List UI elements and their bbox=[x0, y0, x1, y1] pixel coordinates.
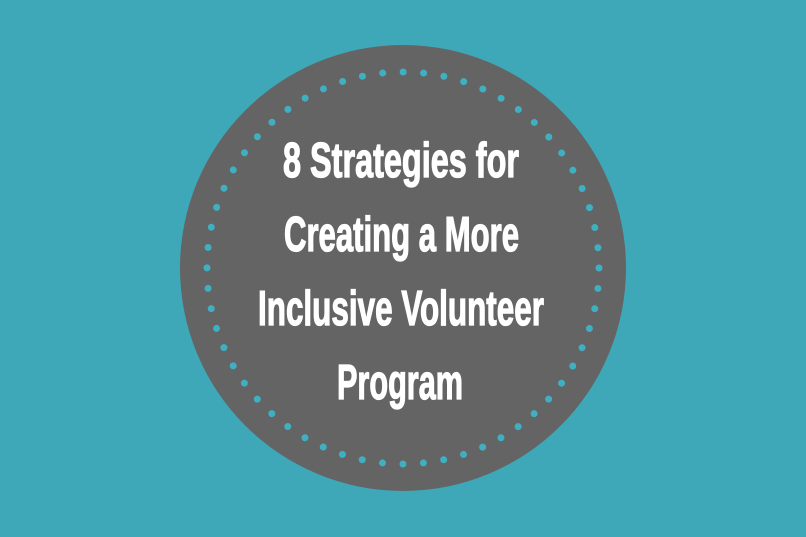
title: Program bbox=[337, 356, 463, 410]
panel: grey circle bbox=[180, 45, 626, 491]
title: Creating a More bbox=[284, 208, 519, 262]
title: 8 Strategies for bbox=[283, 134, 519, 188]
title bbox=[258, 134, 544, 410]
title: Inclusive Volunteer bbox=[258, 282, 544, 336]
